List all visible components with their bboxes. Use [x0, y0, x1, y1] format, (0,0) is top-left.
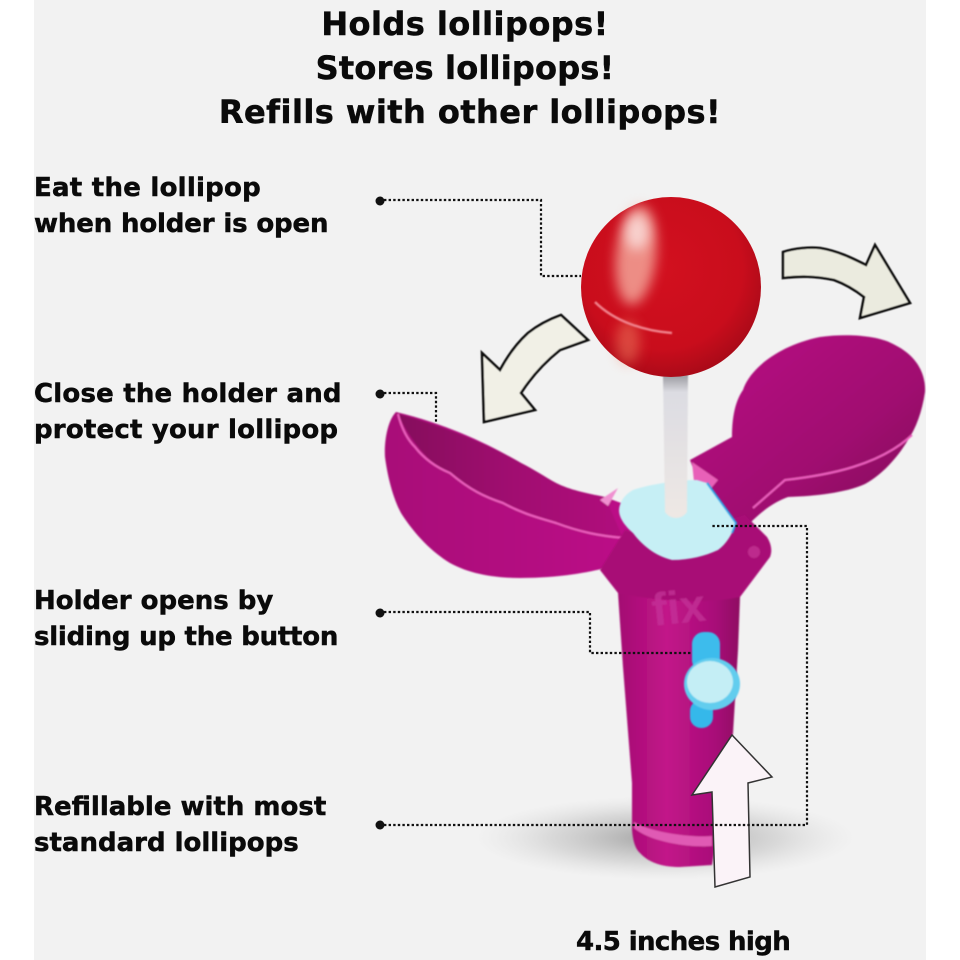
- arrow: left: [482, 315, 588, 422]
- text: refillable: standard lollipops: [34, 828, 299, 858]
- arrow: up: [692, 735, 772, 887]
- body: [600, 515, 771, 867]
- button: [684, 632, 740, 728]
- title: Refills with other lollipops!: [219, 93, 721, 131]
- base disc: [619, 480, 736, 560]
- text: eat the lollipop: Eat the lollipop: [34, 173, 261, 203]
- logo: fix: fix: [649, 578, 708, 636]
- lollipop stick: [663, 375, 688, 518]
- text: eat the lollipop: when holder is open: [34, 208, 328, 238]
- text: holder opens: [34, 586, 338, 652]
- text: close the holder: [34, 379, 342, 444]
- text: holder opens: sliding up the button: [34, 622, 338, 652]
- leader line: close: [376, 390, 436, 422]
- text: refillable: Refillable with most: [34, 792, 326, 822]
- arrow: right: [783, 245, 910, 318]
- collar: [600, 515, 771, 601]
- text: refillable: [34, 792, 326, 858]
- text: close the holder: Close the holder and: [34, 379, 342, 409]
- leader line: refill: [376, 526, 807, 830]
- title: Holds lollipops!: [321, 5, 609, 43]
- shadow: [475, 796, 855, 880]
- right spoon: [690, 335, 925, 525]
- text: eat the lollipop: [34, 173, 328, 238]
- lollipop: [581, 197, 761, 377]
- text: holder opens: Holder opens by: [34, 586, 273, 616]
- leader line: eat: [376, 196, 581, 276]
- left spoon: [385, 412, 650, 578]
- text: height: 4.5 inches high: [576, 927, 790, 957]
- leader line: opens: [376, 608, 692, 653]
- title: [219, 5, 721, 131]
- title: Stores lollipops!: [316, 49, 614, 87]
- text: close the holder: protect your lollipop: [34, 414, 338, 444]
